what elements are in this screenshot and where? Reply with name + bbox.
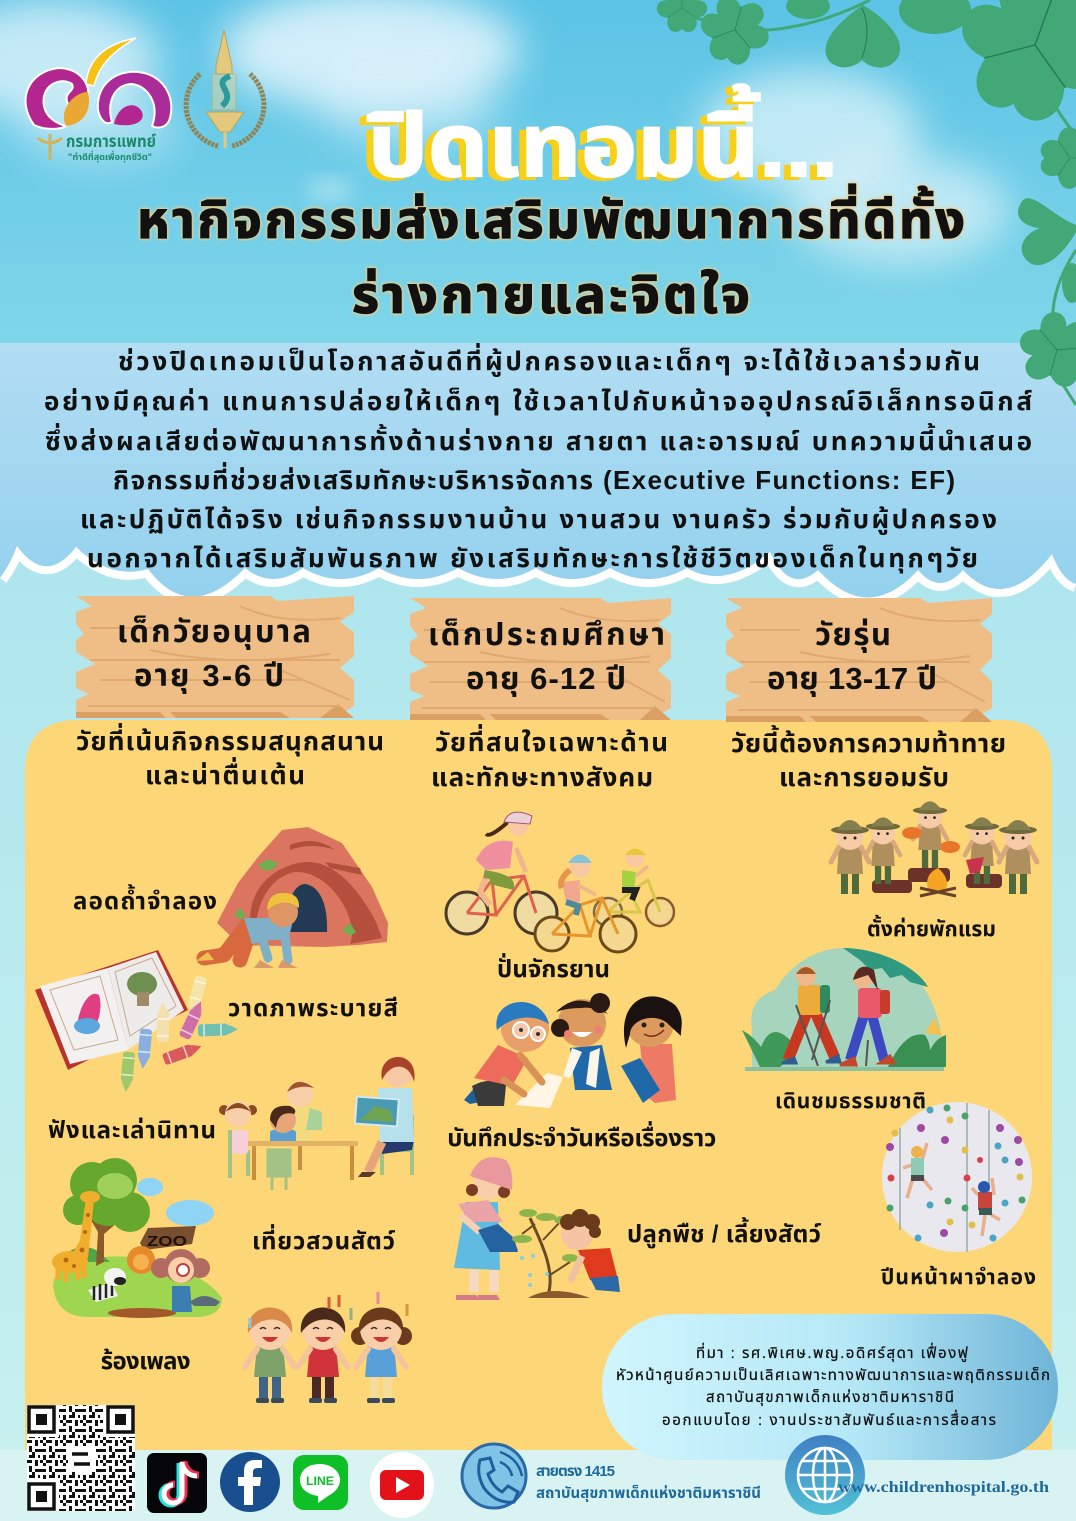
hotline text: สายตรง 1415 [536,1463,615,1480]
callout: source credits [602,1314,1058,1460]
callout: source credits: ออกแบบโดย : งานประชาสัมพันธ์และการสื่อสาร [662,1409,996,1429]
sign: teens: วัยรุ่น [815,617,891,653]
label: drawing: วาดภาพระบายสี [228,995,398,1022]
sign: teens: อายุ 13-17 ปี [767,661,937,697]
label: singing: ร้องเพลง [101,1347,191,1375]
column heading: teens [731,725,1006,792]
sign: kindergarten: อายุ 3-6 ปี [134,658,284,694]
sign: kindergarten: เด็กวัยอนุบาล [117,614,311,650]
label: cycling: ปั่นจักรยาน [497,953,610,983]
cloud band [0,343,1076,598]
sign: primary school: เด็กประถมศึกษา [428,617,665,652]
illustration: planting [454,1157,620,1300]
intro paragraph: และปฏิบัติได้จริง เช่นกิจกรรมงานบ้าน งานสวน งานครัว ร่วมกับผู้ปกครอง [80,504,997,535]
intro paragraph: ซึ่งส่งผลเสียต่อพัฒนาการทั้งด้านร่างกาย สายตา และอารมณ์ บทความนี้นำเสนอ [45,423,1032,456]
sign: primary school: อายุ 6-12 ปี [466,661,626,697]
illustration: cave crawl [196,827,388,968]
callout: source credits: สถาบันสุขภาพเด็กแห่งชาติมหาราชินี [706,1388,954,1406]
footer strip [0,1450,1076,1521]
column heading: kindergarten: และน่าตื่นเต้น [145,757,305,790]
logo: royal emblem [186,30,264,148]
label: planting: ปลูกพืช / เลี้ยงสัตว์ [627,1217,822,1249]
sign: teens [726,598,992,722]
column heading: teens: วัยนี้ต้องการความท้าทาย [731,725,1006,758]
illustration: storytelling [219,1057,415,1190]
hotline text [536,1463,761,1502]
label: climbing: ปีนหน้าผาจำลอง [880,1266,1036,1289]
illustration: singing [245,1292,412,1403]
intro paragraph: อย่างมีคุณค่า แทนการปล่อยให้เด็กๆ ใช้เวลาไปกับหน้าจออุปกรณ์อิเล็กทรอนิกส์ [44,386,1032,417]
column heading: kindergarten [76,723,384,790]
callout: source credits: ที่มา : รศ.พิเศษ.พญ.อดิศร์สุดา เฟื่องฟู [696,1342,968,1362]
icon: Facebook [220,1452,280,1512]
logo: department of medical services [26,38,171,162]
icon: LINE [293,1455,348,1510]
intro paragraph: กิจกรรมที่ช่วยส่งเสริมทักษะบริหารจัดการ (Executive Functions: EF) [113,462,955,495]
leaves: top right vine [654,0,1076,409]
logo: department of medical services: กรมการแพทย์ [66,132,156,151]
illustration: writing diary [464,993,682,1108]
illustration: zoo: ZOO [147,1233,187,1250]
illustration: bikes [446,812,674,952]
label: camping: ตั้งค่ายพักแรม [867,915,996,941]
icon: YouTube [370,1452,434,1518]
label: hiking: เดินชมธรรมชาติ [775,1090,926,1113]
intro paragraph: นอกจากได้เสริมสัมพันธภาพ ยังเสริมทักษะการใช้ชีวิตของเด็กในทุกๆวัย [87,543,978,574]
title: ปิดเทอมนี้... [367,84,838,195]
callout: source credits: หัวหน้าศูนย์ความเป็นเลิศเฉพาะทางพัฒนาการและพฤติกรรมเด็ก [616,1366,1050,1384]
column heading: teens: และการยอมรับ [779,762,949,792]
sign: kindergarten [76,596,354,718]
subtitle [137,184,965,325]
column heading: primary: วัยที่สนใจเฉพาะด้าน [435,724,668,757]
label: diary: บันทึกประจำวันหรือเรื่องราว [447,1121,716,1152]
website url: www.childrenhospital.go.th [838,1479,1049,1496]
illustration: climbing wall [882,1102,1032,1252]
subtitle: หากิจกรรมส่งเสริมพัฒนาการที่ดีทั้ง [137,184,965,250]
column heading: primary: และทักษะทางสังคม [431,762,653,792]
label: storytelling: ฟังและเล่านิทาน [48,1116,216,1144]
icon: LINE: LINE [306,1474,334,1488]
hotline text: สถาบันสุขภาพเด็กแห่งชาติมหาราชินี [536,1484,761,1502]
illustration: zoo [52,1158,222,1318]
illustration: hiking [742,948,946,1071]
panel: yellow activity panel [25,720,1052,1450]
QR code [27,1405,135,1511]
icon: globe [785,1435,865,1515]
label: zoo: เที่ยวสวนสัตว์ [252,1224,396,1255]
intro paragraph: ช่วงปิดเทอมเป็นโอกาสอันดีที่ผู้ปกครองและเด็กๆ จะได้ใช้เวลาร่วมกัน [118,343,980,377]
label: cave: ลอดถ้ำจำลอง [73,884,217,915]
subtitle: ร่างกายและจิตใจ [352,267,750,325]
logo: department of medical services: "ทำดีที่สุดเพื่อทุกชีวิต" [68,150,152,162]
sign: primary school [410,598,671,720]
illustration: coloring book [35,950,238,1092]
column heading: primary [431,724,668,792]
icon: phone [462,1444,526,1508]
title: ปิดเทอมนี้... [360,87,831,198]
intro paragraph [44,343,1032,574]
illustration: camping [831,801,1037,896]
column heading: kindergarten: วัยที่เน้นกิจกรรมสนุกสนาน [76,723,384,757]
icon: TikTok [147,1453,207,1513]
